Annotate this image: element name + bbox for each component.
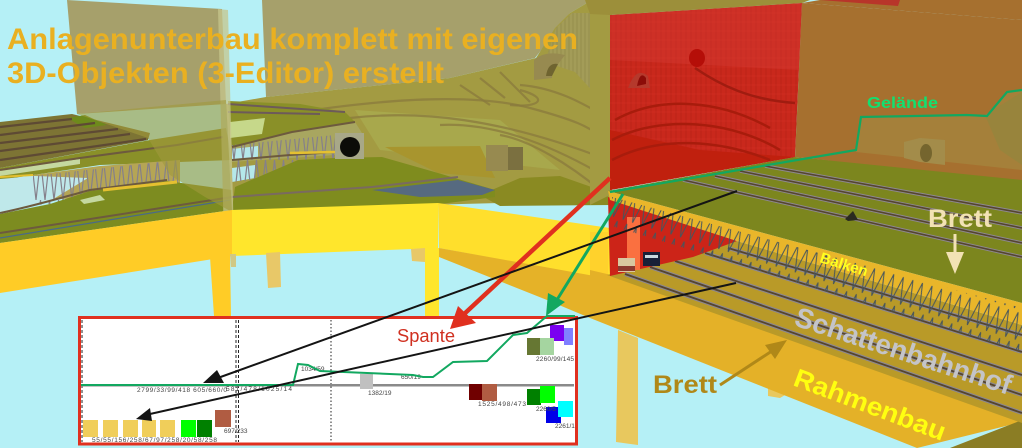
translucent vertical wall edge (218, 9, 234, 240)
terrain: mountain and contour tracks (226, 0, 612, 210)
back wall panel centre (262, 0, 592, 97)
right lower frame board (590, 270, 1022, 448)
black arrow upper (203, 191, 737, 383)
small plan labels: 2799/33/99/418 605/660/0 (137, 387, 227, 394)
small plan labels: 1525/498/473 (478, 401, 526, 408)
label: Rahmenbau: Rahmenbau (790, 363, 950, 447)
right terrain strip by wall (590, 5, 610, 205)
arrow: Brett upper (946, 234, 964, 274)
tunnel portal on brown wall (904, 138, 945, 165)
tunnel portals in terrain (486, 53, 565, 171)
red cross section lower (608, 197, 737, 276)
inset: track plan panel (80, 318, 576, 444)
red section wall (610, 3, 802, 190)
small plan labels: 581/478/1025/14 (226, 386, 292, 393)
table frame: beams (0, 203, 610, 318)
back wall panel left (67, 0, 226, 114)
small plan labels: 1034/59 (301, 366, 325, 373)
title heading: 3D-Objekten (3-Editor) erstellt (7, 57, 444, 90)
locomotive on upper board (845, 211, 858, 221)
model trains (618, 252, 660, 272)
label: Brett upper: Brett (928, 205, 993, 233)
label: Schattenbahnhof: Schattenbahnhof (791, 301, 1016, 401)
small plan labels (92, 356, 575, 444)
fence supports (612, 197, 1022, 352)
small plan labels: 1382/19 (368, 390, 392, 397)
bottom right ground (950, 420, 1022, 448)
green terrain profile on model (610, 90, 1022, 192)
small plan labels: 2261/1 (555, 423, 575, 430)
shadow station board with tracks (607, 241, 1022, 423)
top olive band over wall (585, 0, 810, 15)
label: Brett lower: Brett (653, 371, 718, 399)
green terrain profile in inset (81, 316, 575, 385)
left layout section: green slopes (0, 128, 232, 243)
upper board with tracks (608, 157, 1022, 303)
green arrow (546, 194, 623, 316)
table legs (210, 248, 785, 445)
small plan labels: 650/19 (401, 374, 421, 381)
wall tint over left section (77, 100, 232, 212)
small plan labels: 2260/99/145 (536, 356, 574, 363)
arrow: Brett lower (720, 340, 787, 385)
red arrow to Spante (450, 178, 610, 329)
brown section wall (795, 0, 1022, 180)
small plan labels: 55/55/156/258/67/97/258/20/58/258 (92, 437, 217, 444)
beam band (608, 191, 1022, 325)
baseline (81, 384, 574, 386)
tunnel portal with black arch (335, 133, 364, 159)
title heading (7, 23, 578, 90)
black arrow lower (136, 283, 736, 421)
small plan labels: 2260/5 (536, 406, 556, 413)
label: Gelände: Gelände (867, 95, 938, 112)
centre layout section (228, 101, 495, 210)
small wall text: Spante label: Spante (397, 325, 455, 346)
small plan labels: 697/233 (224, 428, 248, 435)
title heading: Anlagenunterbau komplett mit eigenen (7, 23, 578, 56)
left layout section: upper tracks (0, 114, 150, 168)
dashed section markers (82, 320, 331, 442)
plan blocks (83, 325, 573, 437)
label: Balken: Balken (818, 250, 870, 280)
